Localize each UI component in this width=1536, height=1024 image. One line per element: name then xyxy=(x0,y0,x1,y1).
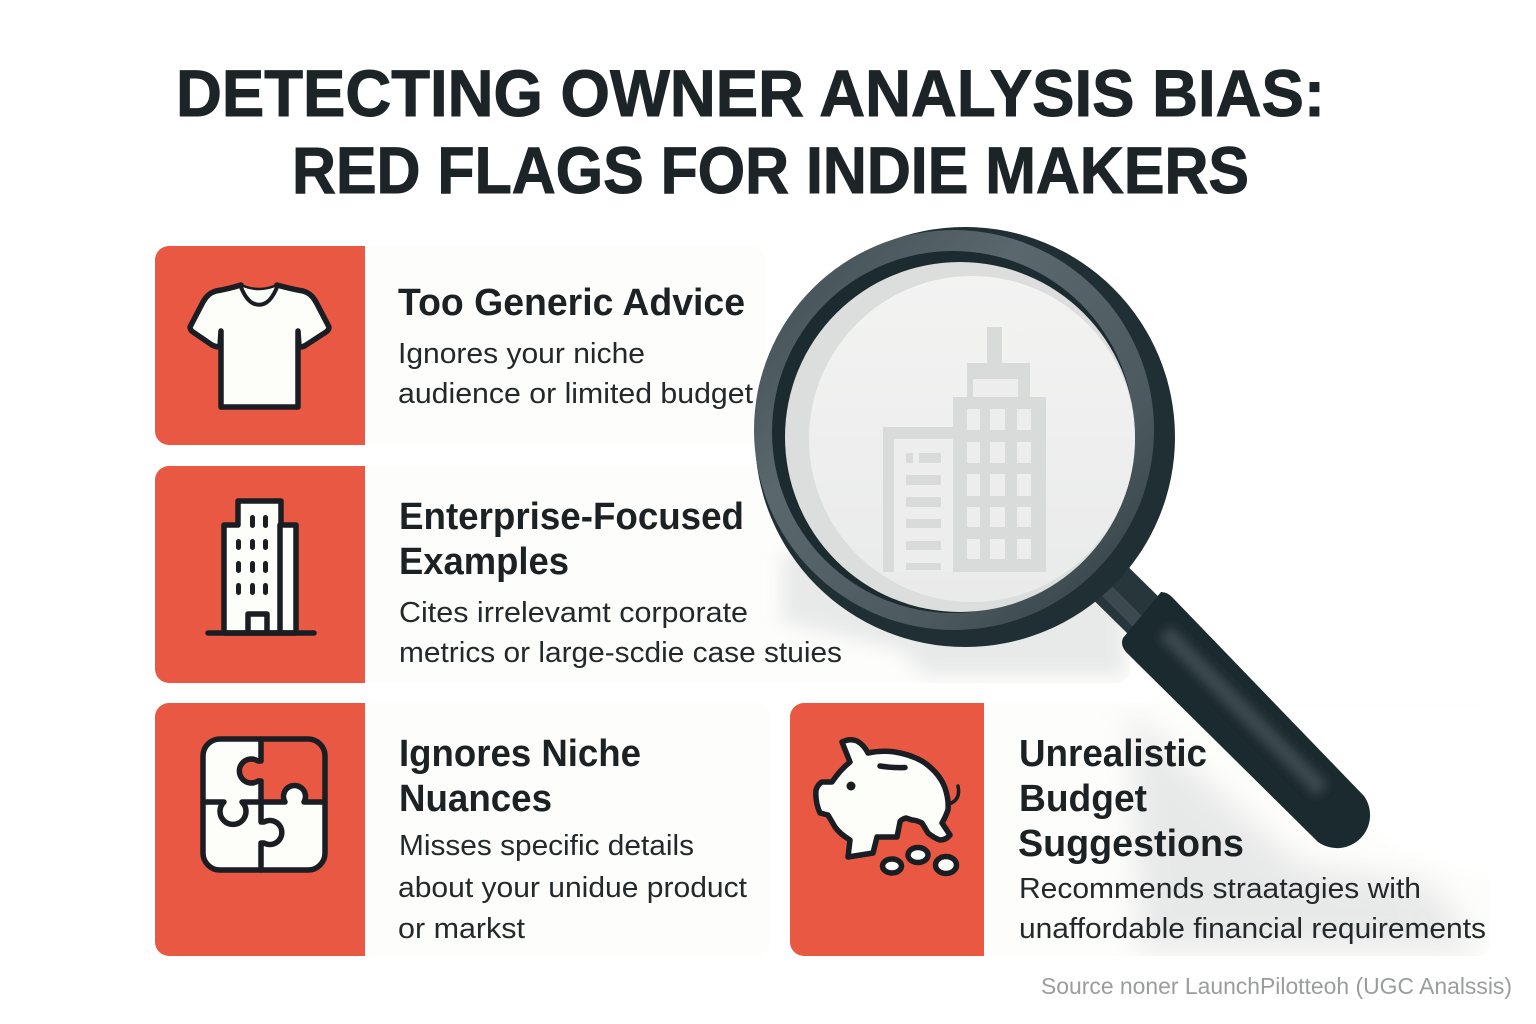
title xyxy=(176,56,1325,207)
heading: enterprise-focused examples: Examples xyxy=(399,541,569,583)
description: enterprise-focused examples: metrics or large-scdie case stuies xyxy=(399,637,842,669)
description: unrealistic budget suggestions: unaffordable financial requirements xyxy=(1019,913,1486,945)
magnifier handle xyxy=(1085,558,1370,848)
panel: too generic advice xyxy=(155,246,765,445)
icon: puzzle xyxy=(203,739,325,870)
heading: unrealistic budget suggestions xyxy=(1018,733,1244,865)
heading: ignores niche nuances: Nuances xyxy=(399,778,552,820)
source note: Source noner LaunchPilotteoh (UGC Analssis) xyxy=(1041,973,1512,999)
description: unrealistic budget suggestions: Recommends straatagies with xyxy=(1019,873,1421,905)
description: enterprise-focused examples: Cites irrelevamt corporate xyxy=(399,597,748,629)
description: enterprise-focused examples xyxy=(399,597,842,669)
magnifying glass xyxy=(754,227,1370,848)
heading: ignores niche nuances xyxy=(399,733,641,820)
area right of the handle stays white xyxy=(1190,703,1490,880)
heading: enterprise-focused examples: Enterprise-Focused xyxy=(399,496,744,538)
icon: t-shirt xyxy=(190,285,329,407)
heading: enterprise-focused examples xyxy=(399,496,744,583)
description: ignores niche nuances: or markst xyxy=(398,913,525,945)
heading: unrealistic budget suggestions: Unrealistic xyxy=(1019,733,1207,775)
description: unrealistic budget suggestions xyxy=(1019,873,1486,945)
description: too generic advice xyxy=(398,338,753,410)
description: too generic advice: audience or limited budget xyxy=(398,378,753,410)
icon: piggy bank xyxy=(816,740,959,874)
heading: ignores niche nuances: Ignores Niche xyxy=(399,733,641,775)
heading: too generic advice: Too Generic Advice xyxy=(398,282,745,324)
panel: ignores niche nuances xyxy=(155,703,770,956)
ghost building in lens xyxy=(883,327,1046,572)
heading: unrealistic budget suggestions: Suggestions xyxy=(1018,823,1244,865)
description: ignores niche nuances xyxy=(398,830,747,945)
handle shadow on panel xyxy=(1130,715,1480,950)
description: ignores niche nuances: about your unidue product xyxy=(398,872,747,904)
icon: office building xyxy=(208,501,314,633)
description: too generic advice: Ignores your niche xyxy=(398,338,645,370)
panel: unrealistic budget suggestions xyxy=(790,703,1490,956)
lens shadow on panel xyxy=(782,553,1125,676)
description: ignores niche nuances: Misses specific details xyxy=(399,830,694,862)
panel: enterprise-focused examples xyxy=(155,466,1130,683)
magnifier lens xyxy=(754,227,1175,647)
title: DETECTING OWNER ANALYSIS BIAS: xyxy=(176,56,1325,130)
title: RED FLAGS FOR INDIE MAKERS xyxy=(292,133,1249,207)
heading: unrealistic budget suggestions: Budget xyxy=(1019,778,1147,820)
